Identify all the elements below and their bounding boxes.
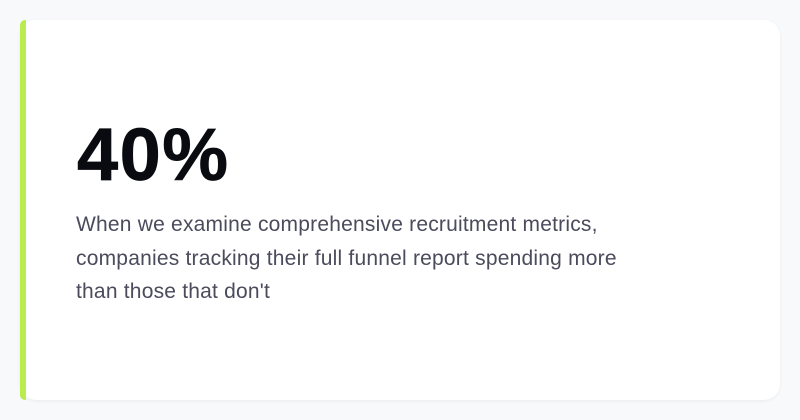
text block: description [76, 213, 617, 303]
heading: 40% statistic: 40% [77, 113, 230, 196]
text block: description: than those that don't [76, 280, 270, 303]
accent bar [20, 20, 26, 400]
text block: description: companies tracking their full funnel report spending more [76, 246, 617, 270]
text block: description: When we examine comprehensive recruitment metrics, [76, 213, 598, 236]
